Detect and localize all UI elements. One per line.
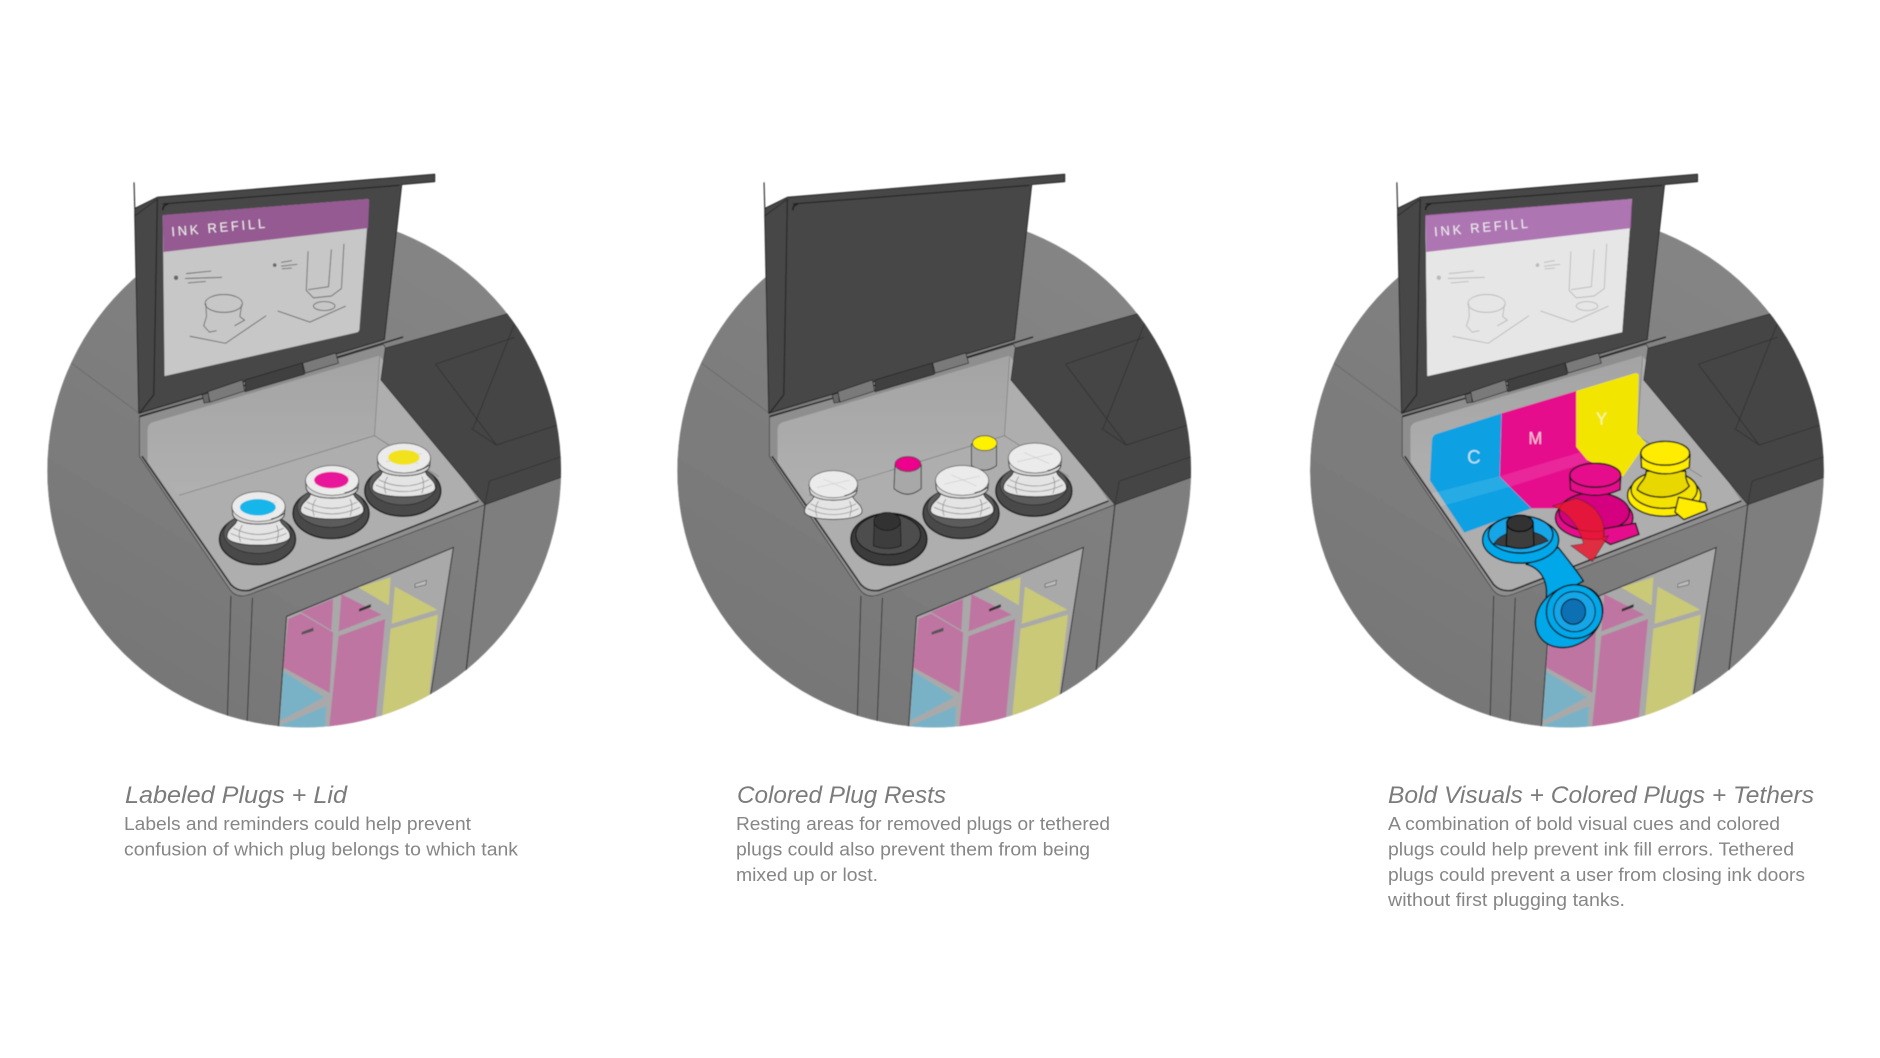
yellow plug rest	[971, 436, 997, 470]
body text	[1387, 813, 1805, 910]
body text: Resting areas for removed plugs or tethered	[736, 813, 1110, 834]
body text: without first plugging tanks.	[1387, 889, 1625, 910]
magenta labeled plug	[293, 466, 369, 539]
white plug center	[923, 466, 999, 539]
yellow plug	[1628, 441, 1707, 520]
column 2 caption	[736, 782, 1110, 885]
body text: plugs could prevent a user from closing ink doors	[1388, 864, 1805, 885]
column 1 caption	[124, 782, 519, 860]
body text: plugs could help prevent ink fill errors. Tethered	[1388, 838, 1794, 860]
body text: A combination of bold visual cues and colored	[1388, 813, 1780, 834]
cyan labeled plug	[219, 492, 296, 565]
magenta plug	[1555, 463, 1639, 545]
tethered cyan plug	[1483, 515, 1614, 660]
body text: mixed up or lost.	[736, 864, 878, 885]
panel: labeled plugs and lid illustration	[47, 174, 568, 741]
yellow stripe	[1576, 373, 1646, 477]
panel: colored plug rests illustration	[677, 174, 1198, 741]
panel: bold visuals, colored plugs and tethers illustration	[1310, 174, 1831, 741]
magenta stripe	[1500, 391, 1623, 508]
instruction card on lid, brighter	[1426, 199, 1632, 376]
body text: confusion of which plug belongs to which tank	[124, 838, 519, 860]
stripe letter M: M	[1529, 429, 1542, 448]
heading: Bold Visuals + Colored Plugs + Tethers	[1388, 782, 1814, 809]
stripe letter C: C	[1467, 447, 1481, 469]
printer body with blank lid	[677, 174, 1198, 741]
printer body with open lid	[47, 174, 568, 741]
instruction card on lid	[163, 199, 369, 376]
column 3 caption	[1387, 782, 1814, 910]
red arrow	[1553, 498, 1609, 562]
cyan stripe	[1430, 413, 1531, 533]
printer body with open lid	[1310, 174, 1831, 741]
body text: plugs could also prevent them from being	[736, 838, 1090, 860]
instruction card on lid, brighter: INK REFILL	[1434, 216, 1528, 239]
body text: Labels and reminders could help prevent	[124, 813, 471, 834]
yellow labeled plug	[365, 443, 441, 516]
removed plug at rest	[805, 471, 862, 519]
stripe bend highlight	[1431, 452, 1589, 507]
stripe letter Y: Y	[1596, 409, 1607, 429]
heading: Labeled Plugs + Lid	[125, 782, 348, 809]
heading: Colored Plug Rests	[737, 782, 946, 809]
magenta plug rest	[894, 457, 921, 494]
body text	[736, 813, 1110, 885]
body text	[124, 813, 519, 860]
open tank post	[851, 512, 927, 565]
white plug right	[996, 443, 1072, 516]
